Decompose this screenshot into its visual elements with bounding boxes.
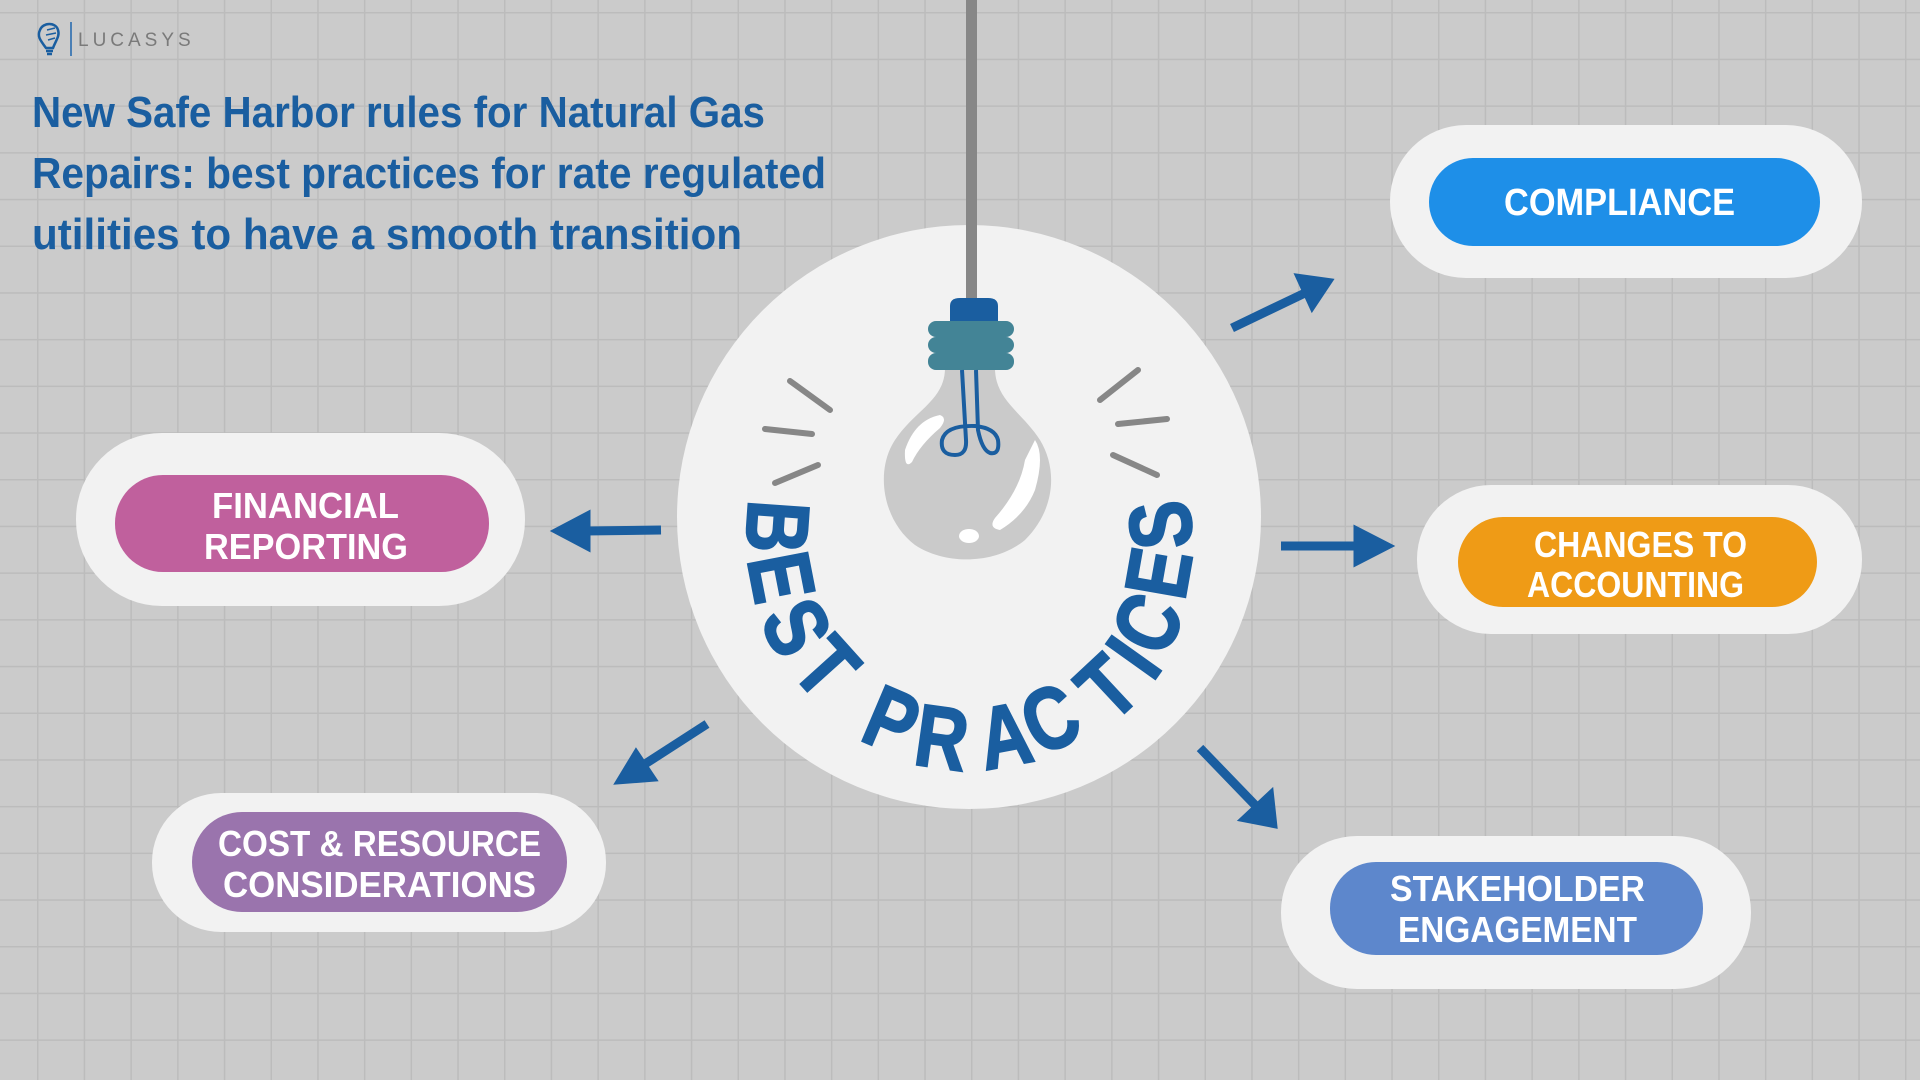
curved text: BEST PRACTICES: R bbox=[909, 686, 974, 791]
title: Repairs: best practices for rate regulated bbox=[32, 149, 826, 198]
logo: LUCASYS bbox=[78, 30, 195, 51]
central circle: best practices bbox=[677, 0, 1261, 809]
arrow: to financial bbox=[553, 512, 661, 550]
icon: logo bulb bbox=[39, 24, 59, 54]
title bbox=[32, 88, 838, 259]
panel: financial reporting: REPORTING bbox=[204, 526, 408, 567]
curved text: BEST PRACTICES: E bbox=[728, 544, 833, 610]
panel: stakeholder engagement: STAKEHOLDER bbox=[1390, 868, 1645, 909]
curved text: BEST PRACTICES: C bbox=[1093, 579, 1204, 668]
panel: stakeholder engagement: ENGAGEMENT bbox=[1398, 909, 1637, 950]
arrow: to changes bbox=[1281, 527, 1392, 565]
arrow: to cost bbox=[616, 724, 707, 783]
panel: changes to accounting: ACCOUNTING bbox=[1527, 564, 1744, 605]
curved text: BEST PRACTICES: B bbox=[726, 497, 827, 556]
rays bbox=[765, 370, 1167, 483]
panel: compliance: COMPLIANCE bbox=[1504, 182, 1735, 224]
panel: changes to accounting bbox=[1417, 485, 1862, 634]
curved text: BEST PRACTICES: T bbox=[1058, 637, 1158, 739]
panel: financial reporting bbox=[76, 433, 525, 606]
title: New Safe Harbor rules for Natural Gas bbox=[32, 88, 765, 137]
logo bbox=[39, 22, 195, 56]
curved text: BEST PRACTICES: E bbox=[1107, 541, 1212, 606]
icon: light bulb bbox=[884, 298, 1051, 559]
curved text: BEST PRACTICES: I bbox=[1088, 621, 1180, 695]
curved text: BEST PRACTICES: S bbox=[741, 584, 850, 671]
panel: cost & resource considerations: CONSIDERATIONS bbox=[223, 864, 536, 905]
panel: changes to accounting: CHANGES TO bbox=[1534, 524, 1747, 565]
panel: stakeholder engagement bbox=[1281, 836, 1751, 989]
arrow: to compliance bbox=[1232, 275, 1332, 328]
curved text: BEST PRACTICES: P bbox=[850, 667, 933, 776]
curved text: BEST PRACTICES: S bbox=[1111, 497, 1212, 553]
cord bbox=[966, 0, 977, 310]
panel: compliance bbox=[1390, 125, 1862, 278]
curved text: BEST PRACTICES: C bbox=[1006, 664, 1095, 775]
curved text: BEST PRACTICES bbox=[726, 497, 1212, 791]
curved text: BEST PRACTICES: T bbox=[775, 619, 877, 717]
arrow: to stakeholder bbox=[1200, 748, 1276, 827]
curved text: BEST PRACTICES: A bbox=[971, 683, 1040, 790]
title: utilities to have a smooth transition bbox=[32, 210, 742, 259]
panel: cost & resource considerations bbox=[152, 793, 606, 932]
panel: financial reporting: FINANCIAL bbox=[212, 485, 399, 526]
panel: cost & resource considerations: COST & RESOURCE bbox=[218, 823, 541, 864]
